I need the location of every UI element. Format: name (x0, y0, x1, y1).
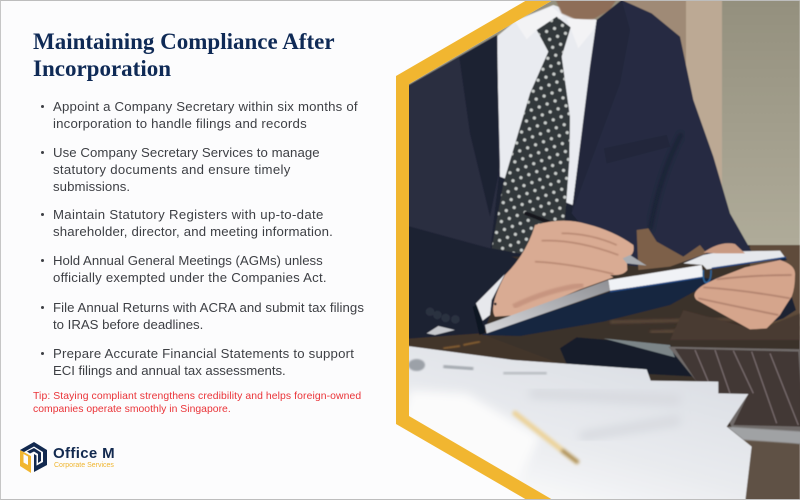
bullet: financial statements: ECI filings and annual tax assessments. (53, 363, 286, 378)
bullet: annual returns: File Annual Returns with ACRA and submit tax filings (53, 300, 364, 315)
wall background (400, 0, 800, 260)
shirt collar (516, 8, 562, 38)
icon: isometric box (20, 442, 47, 473)
bullet: annual returns: to IRAS before deadlines. (53, 317, 203, 332)
shirt (497, 5, 597, 207)
lower left jacket sleeve (409, 227, 518, 339)
book spine (703, 270, 711, 283)
right finger creases (698, 275, 792, 315)
book cover edge (610, 257, 786, 292)
book cover (482, 257, 787, 336)
bullet: annual general meetings: Hold Annual General Meetings (AGMs) unless (53, 253, 323, 268)
bullet: company secretary services: statutory documents and ensure timely (53, 162, 291, 177)
laptop keyboard (675, 349, 800, 427)
tip callout: Tip: Staying compliant strengthens credibility and helps foreign-owned (33, 391, 361, 402)
left hand (493, 221, 634, 317)
book right pages (683, 251, 785, 269)
photo panel with hexagon frame (396, 1, 800, 499)
book page edge (485, 280, 610, 333)
right cuff (767, 297, 796, 324)
pen nib (623, 255, 647, 266)
bullet: statutory registers: Maintain Statutory Registers with up-to-date (53, 207, 324, 222)
laptop lid highlight (603, 338, 675, 357)
desk grain left (443, 342, 480, 348)
blurred pencil (515, 413, 578, 463)
laptop front edge (727, 427, 800, 444)
sleeve cuff band (473, 305, 486, 335)
jacket sleeve shadow (650, 133, 682, 230)
bullet: appoint a company secretary: incorporation to handle filings and records (53, 116, 307, 131)
bullet: financial statements: Prepare Accurate Financial Statements to support (53, 346, 354, 361)
tip callout: companies operate smoothly in Singapore. (33, 404, 231, 415)
jacket right (572, 0, 753, 267)
brand name: Office M (53, 445, 115, 462)
bullet: annual general meetings: officially exempted under the Companies Act. (53, 270, 327, 285)
pen barrel (526, 213, 548, 222)
right thumb (703, 243, 745, 253)
laptop screen back (560, 337, 697, 377)
bullet: appoint a company secretary: Appoint a Company Secretary within six months of (53, 99, 358, 114)
desk edge left (409, 332, 487, 356)
bullet: statutory registers (41, 207, 333, 239)
title: Maintaining Compliance After (33, 29, 335, 54)
hands and notebook (473, 213, 800, 340)
bullet: company secretary services (41, 145, 320, 194)
sleeve buttons (426, 307, 460, 324)
neck and beard (555, 0, 617, 20)
book pages (608, 265, 703, 291)
palm shading (513, 285, 583, 307)
title (33, 29, 335, 81)
bullet: annual returns (41, 300, 364, 332)
cuff (476, 274, 505, 321)
logo (20, 442, 115, 473)
photo: businessman writing in notebook (400, 0, 800, 500)
wooden desk (483, 244, 800, 499)
jacket right lapel (572, 1, 622, 206)
desk under book (670, 310, 800, 340)
tip callout (33, 391, 361, 415)
bullet: statutory registers: shareholder, director, and meeting information. (53, 224, 333, 239)
bullet: company secretary services: Use Company Secretary Services to manage (53, 145, 320, 160)
jacket left (409, 35, 500, 248)
mole (494, 303, 497, 305)
jacket pocket (604, 135, 670, 163)
wood behind hands (637, 228, 707, 270)
right hand (694, 260, 795, 329)
bullet: annual general meetings (41, 253, 327, 285)
title: Incorporation (33, 56, 171, 81)
white shirt tail (427, 326, 455, 335)
brand tagline: Corporate Services (54, 462, 114, 469)
bullet: company secretary services: submissions. (53, 179, 130, 194)
finger creases (535, 233, 618, 274)
papers (400, 345, 752, 500)
tie (492, 17, 571, 257)
bullet: financial statements (41, 346, 354, 378)
bullet: appoint a company secretary (41, 99, 358, 131)
dark base behind shirt and tie (490, 168, 580, 257)
laptop base (668, 347, 800, 445)
yellow hexagon frame (396, 0, 553, 500)
shirt collar right (568, 18, 596, 46)
jacket left lapel (459, 35, 499, 217)
